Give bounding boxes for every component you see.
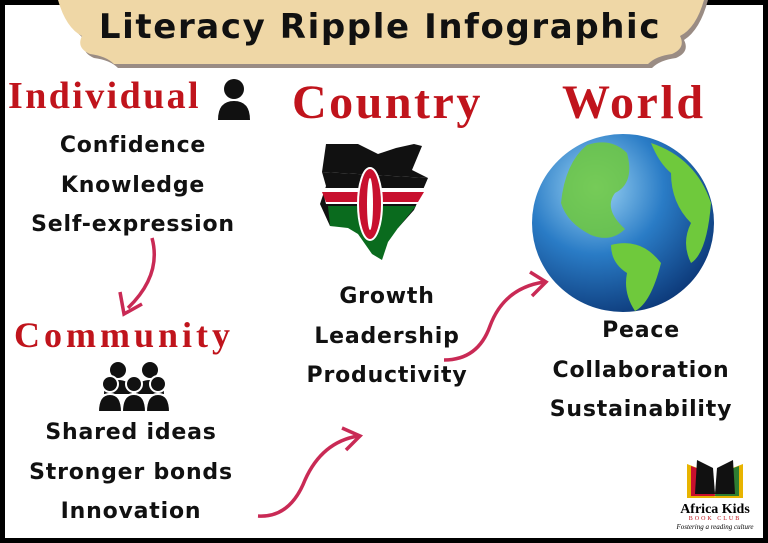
- list: community: Shared ideas: [45, 420, 217, 445]
- list: community: [29, 420, 233, 524]
- list: country: Growth: [339, 284, 435, 309]
- logo: Africa Kids Book Club: Fostering a reading culture: [676, 523, 754, 531]
- title banner: [58, 0, 708, 68]
- list: country: [307, 284, 467, 388]
- icon: group: [99, 362, 169, 411]
- logo: Africa Kids Book Club: Africa Kids: [680, 502, 750, 517]
- list: world: Peace: [602, 318, 680, 343]
- list: country: Leadership: [314, 324, 460, 348]
- logo: Africa Kids Book Club: [676, 460, 754, 531]
- heading: Community: Community: [14, 315, 234, 355]
- list: individual: Knowledge: [61, 172, 205, 198]
- arrow: community to country: [258, 426, 363, 518]
- list: world: [550, 318, 732, 422]
- list: country: Productivity: [307, 363, 467, 388]
- heading: World: World: [562, 76, 706, 129]
- heading: Country: Country: [292, 76, 483, 129]
- icon: Kenya map: [320, 144, 428, 260]
- list: community: Innovation: [61, 499, 201, 524]
- list: world: Sustainability: [550, 397, 732, 422]
- title: Literacy Ripple Infographic: [99, 7, 661, 47]
- list: world: Collaboration: [552, 358, 729, 382]
- list: individual: Self-expression: [31, 212, 235, 237]
- arrow: country to world: [444, 270, 549, 362]
- heading: Individual: Individual: [8, 75, 201, 117]
- logo: Africa Kids Book Club: BOOK CLUB: [689, 516, 741, 522]
- arrow: individual to community: [118, 238, 156, 317]
- icon: person: [218, 79, 250, 120]
- icon: globe: [532, 134, 714, 312]
- list: community: Stronger bonds: [29, 460, 233, 484]
- list: individual: Confidence: [60, 133, 206, 158]
- list: individual: [31, 133, 235, 237]
